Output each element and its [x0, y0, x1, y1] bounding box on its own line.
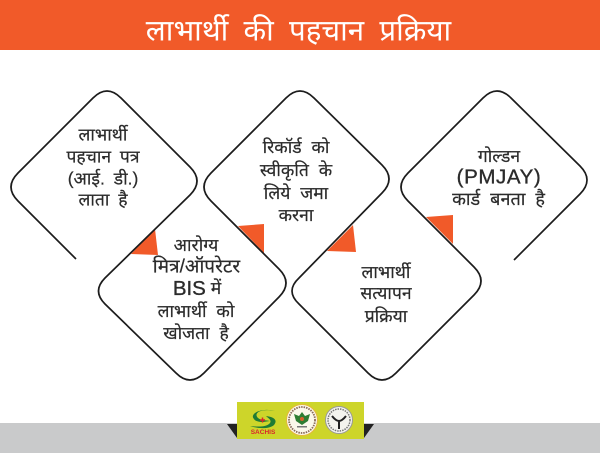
continuous diamond flow outline [11, 91, 587, 380]
step 5 text: गोल्डन [478, 146, 520, 166]
logo: SACHIS: SACHIS [251, 429, 276, 436]
orange arrow triangle 4 [426, 215, 453, 244]
footer band [0, 423, 600, 453]
step 5 text [452, 146, 545, 209]
logo: Ayushman Bharat [286, 404, 318, 436]
step 5 text: कार्ड बनता है [452, 188, 545, 209]
footer ribbon fold left [227, 424, 237, 438]
step 5 text: (PMJAY) [457, 166, 541, 188]
step 2 text: खोजता है [163, 323, 229, 343]
step 1 text: (आई. डी.) [68, 168, 138, 188]
step 2 text: मित्र/ऑपरेटर [153, 254, 241, 278]
step 3 text: लिये जमा [264, 183, 329, 203]
step 1 text: लाभार्थी [79, 124, 129, 144]
step 4 text: प्रक्रिया [365, 306, 408, 326]
step 4 text [360, 262, 412, 326]
step 3 text [260, 137, 333, 225]
orange arrow triangle 2 [238, 224, 264, 253]
orange arrow triangle 1 [131, 229, 158, 255]
step 1 text: लाता है [78, 190, 128, 210]
title: लाभार्थी की पहचान प्रक्रिया [146, 14, 453, 48]
orange arrow triangle 3 [327, 225, 356, 252]
logo panel [237, 402, 364, 439]
step 4 text: सत्यापन [360, 283, 412, 303]
step 2 text: आरोग्य [174, 235, 219, 255]
step 2 text: लाभार्थी को [158, 301, 235, 321]
header bar [0, 0, 600, 50]
step 2 text [153, 235, 241, 343]
step 4 text: लाभार्थी [362, 262, 412, 282]
step 1 text [66, 124, 140, 210]
step 3 text: करना [279, 205, 314, 225]
logo: Uttar Pradesh emblem [326, 406, 352, 434]
step 2 text: BIS में [173, 276, 222, 300]
step 1 text: पहचान पत्र [66, 146, 140, 166]
footer ribbon fold right [364, 424, 374, 438]
step 3 text: स्वीकृति के [260, 160, 333, 181]
step 3 text: रिकॉर्ड को [263, 137, 330, 157]
